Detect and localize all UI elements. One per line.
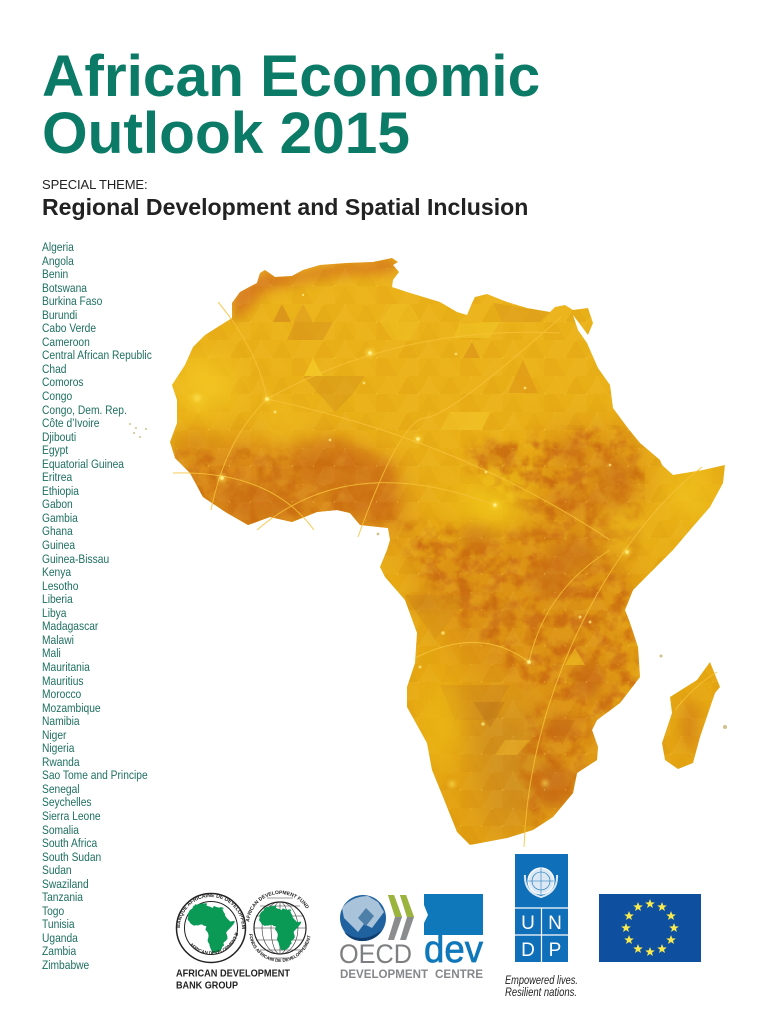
bank name: AFRICAN DEVELOPMENT <box>176 968 291 980</box>
country list: Uganda <box>42 931 78 945</box>
title: African Economic <box>42 44 540 109</box>
theme heading: Regional Development and Spatial Inclusion <box>42 194 528 220</box>
tagline: Resilient nations. <box>505 985 577 999</box>
country list: Malawi <box>42 633 74 647</box>
dev panel: dev <box>424 929 483 971</box>
country list: Somalia <box>42 823 79 837</box>
OECD wordmark: OECD <box>339 939 412 969</box>
city lights <box>194 294 630 787</box>
letters: P <box>549 940 561 961</box>
country list: Gabon <box>42 497 73 511</box>
country list: Guinea <box>42 538 75 552</box>
country list: Madagascar <box>42 619 98 633</box>
country list: Nigeria <box>42 741 74 755</box>
country list: Sudan <box>42 863 72 877</box>
letters: D <box>521 940 535 961</box>
country list: Togo <box>42 904 64 918</box>
bank name <box>176 968 291 992</box>
country list: Gambia <box>42 511 78 525</box>
country list: Burkina Faso <box>42 294 102 308</box>
country list: Eritrea <box>42 470 72 484</box>
country list: Kenya <box>42 565 71 579</box>
mottled relief <box>175 425 645 830</box>
centre name <box>340 968 483 981</box>
fund seal <box>246 890 310 962</box>
tagline <box>505 973 578 999</box>
title <box>42 44 540 166</box>
country list: Liberia <box>42 592 73 606</box>
country list: Comoros <box>42 375 84 389</box>
country list: Zimbabwe <box>42 958 89 972</box>
small islands <box>129 423 727 729</box>
UN emblem <box>525 868 557 897</box>
country list: Mozambique <box>42 701 101 715</box>
country list: Mauritius <box>42 674 84 688</box>
special theme label: SPECIAL THEME: <box>42 177 148 192</box>
country list: Ethiopia <box>42 484 79 498</box>
letters: N <box>548 913 562 934</box>
country list: Niger <box>42 728 66 742</box>
country list: Tanzania <box>42 890 83 904</box>
base colour <box>160 250 730 850</box>
country list: Guinea-Bissau <box>42 552 109 566</box>
bright glows <box>175 357 710 770</box>
centre name: DEVELOPMENT <box>340 968 428 981</box>
country list: Djibouti <box>42 430 76 444</box>
country list: Namibia <box>42 714 80 728</box>
bank name: BANK GROUP <box>176 980 238 992</box>
country list: Ghana <box>42 524 73 538</box>
country list: Egypt <box>42 443 68 457</box>
logo: African Development Bank <box>176 890 310 992</box>
country list: Equatorial Guinea <box>42 457 124 471</box>
logo: European Union flag <box>599 894 701 962</box>
country list: Cameroon <box>42 335 90 349</box>
country list: Morocco <box>42 687 81 701</box>
grid <box>515 908 568 962</box>
logo: UNDP <box>505 854 578 999</box>
country list: South Africa <box>42 836 97 850</box>
country list: Benin <box>42 267 68 281</box>
tagline: Empowered lives. <box>505 973 578 987</box>
country list: Mauritania <box>42 660 90 674</box>
country list: South Sudan <box>42 850 101 864</box>
highlighted triangles <box>186 303 585 755</box>
country list: Libya <box>42 606 66 620</box>
country list: Burundi <box>42 308 77 322</box>
country list: Central African Republic <box>42 348 152 362</box>
bank seal: BANQUE AFRICAINE DE DEVELOPPEMENT <box>177 894 245 929</box>
country list: Rwanda <box>42 755 80 769</box>
country list: Zambia <box>42 944 76 958</box>
country list: Tunisia <box>42 917 75 931</box>
shaded regions <box>170 425 650 835</box>
globe <box>340 895 386 941</box>
country list: Algeria <box>42 240 74 254</box>
route arcs <box>173 302 717 847</box>
country list: Angola <box>42 254 74 268</box>
country list: Senegal <box>42 782 80 796</box>
letters: U <box>521 913 535 934</box>
centre name: CENTRE <box>435 968 483 981</box>
bank seal: AFRICAN DEVELOPMENT BANK <box>190 932 238 954</box>
country list: Sao Tome and Principe <box>42 768 148 782</box>
country list: Congo, Dem. Rep. <box>42 403 127 417</box>
country list: Mali <box>42 646 61 660</box>
country list <box>42 240 152 972</box>
triangle mesh <box>160 250 730 850</box>
country list: Sierra Leone <box>42 809 101 823</box>
logo: OECD Development Centre <box>339 894 483 981</box>
country list: Chad <box>42 362 66 376</box>
country list: Seychelles <box>42 795 92 809</box>
map of Africa <box>129 250 730 850</box>
country list: Côte d’Ivoire <box>42 416 99 430</box>
chevrons <box>388 895 414 940</box>
fund seal: FONDS AFRICAIN DE DEVELOPPEMENT <box>249 934 310 962</box>
fund seal: AFRICAN DEVELOPMENT FUND <box>246 890 309 922</box>
panel <box>515 854 568 962</box>
country list: Swaziland <box>42 877 89 891</box>
country list: Botswana <box>42 281 87 295</box>
country list: Congo <box>42 389 72 403</box>
country list: Cabo Verde <box>42 321 96 335</box>
title: Outlook 2015 <box>42 101 410 166</box>
dev panel <box>424 894 483 971</box>
bank seal <box>176 892 246 964</box>
country list: Lesotho <box>42 579 78 593</box>
